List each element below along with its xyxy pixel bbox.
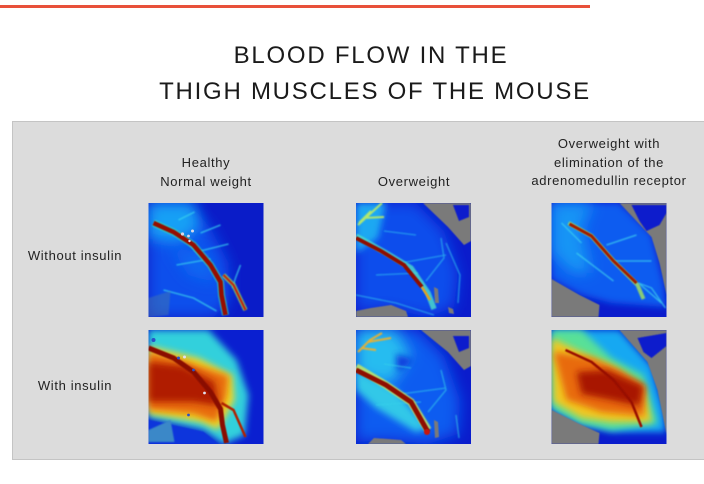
column heading: overweight with receptor elimination [531,136,687,188]
top accent line [0,5,590,8]
image: healthy, without insulin [148,203,264,317]
column heading: overweight with receptor elimination: elimination of the [554,155,664,170]
row label: without insulin: Without insulin [28,248,122,263]
column heading: healthy normal weight: Healthy [182,155,230,170]
title [159,42,591,105]
panel: grey comparison background [12,121,704,460]
title: BLOOD FLOW IN THE [234,42,508,69]
row label: with insulin: With insulin [38,378,112,393]
blood flow images [148,203,666,444]
image: healthy, with insulin [148,330,264,444]
column heading: overweight with receptor elimination: Overweight with [558,136,660,151]
column heading: overweight: Overweight [378,174,450,189]
image: overweight, without insulin [356,203,471,317]
title: THIGH MUSCLES OF THE MOUSE [159,78,591,105]
column heading: healthy normal weight [160,155,252,189]
column heading: healthy normal weight: Normal weight [160,174,252,189]
column heading: overweight with receptor elimination: adrenomedullin receptor [531,173,687,188]
image: receptor elimination, with insulin [552,330,666,444]
image: receptor elimination, without insulin [552,203,666,317]
image: overweight, with insulin [356,330,471,444]
